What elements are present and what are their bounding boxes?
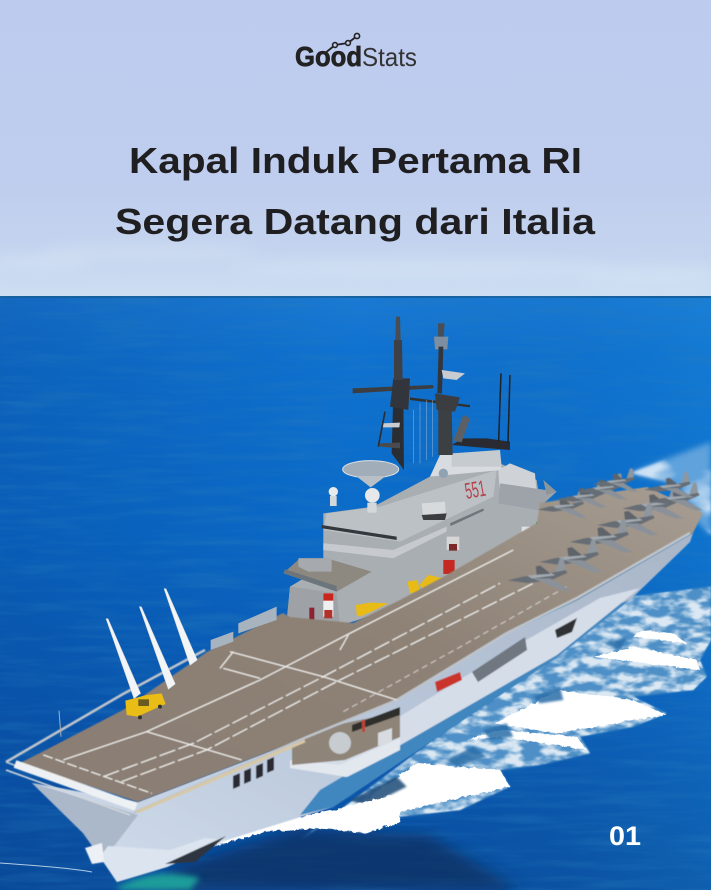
fore mast bbox=[392, 393, 404, 470]
whip antennas bbox=[499, 373, 510, 443]
upper hull side bbox=[300, 588, 640, 777]
ship island superstructure with hull number 551 bbox=[283, 317, 557, 627]
flight deck bbox=[6, 468, 703, 815]
title bbox=[115, 140, 596, 242]
boat davit bbox=[422, 502, 446, 518]
main mast bbox=[438, 410, 453, 455]
radar dome frame bbox=[343, 461, 399, 478]
yellow tractor on deck bbox=[125, 693, 166, 717]
hull gallery windows bbox=[233, 757, 274, 789]
ship hull bbox=[32, 533, 693, 882]
waterline band bbox=[300, 600, 630, 815]
title: Kapal Induk Pertama RI bbox=[129, 140, 582, 181]
right block bbox=[498, 463, 537, 497]
bow antennas and yellow vehicle bbox=[59, 589, 277, 737]
panel: sea background bbox=[0, 296, 711, 890]
gun sponson rail bbox=[211, 607, 277, 650]
horizon clouds bbox=[0, 244, 711, 283]
aft gallery bbox=[472, 637, 527, 682]
sponson with sphere bbox=[290, 738, 400, 777]
flag jets bbox=[508, 468, 703, 591]
panel: sky background bbox=[0, 0, 711, 297]
lower block front bbox=[287, 587, 340, 627]
doors bbox=[447, 537, 459, 550]
title: Segera Datang dari Italia bbox=[115, 201, 596, 242]
deck rails bbox=[6, 533, 690, 813]
yellow tractors bbox=[356, 575, 443, 617]
main block bbox=[287, 463, 543, 627]
lower bow plates bbox=[100, 838, 227, 882]
logo: GoodStats: Good bbox=[295, 41, 362, 72]
deck markings bbox=[43, 550, 567, 793]
logo: GoodStats: Stats bbox=[362, 42, 417, 72]
logo: GoodStats bbox=[295, 33, 417, 72]
foam wake behind the ship bbox=[213, 442, 711, 847]
upper structure light cone bbox=[430, 453, 502, 477]
page number: 01 bbox=[609, 821, 641, 851]
overhang shelf bbox=[283, 558, 372, 592]
bow wave bbox=[213, 793, 400, 847]
hull number: 551 bbox=[463, 475, 488, 504]
shaded bow face bbox=[32, 783, 138, 857]
